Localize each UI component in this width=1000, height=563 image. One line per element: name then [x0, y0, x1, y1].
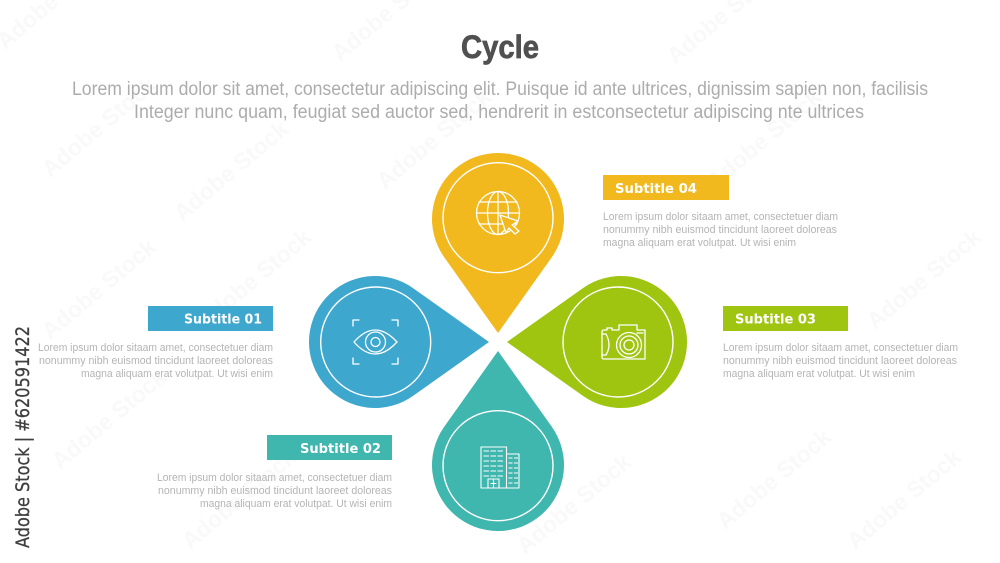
text: Adobe Stock: [192, 223, 316, 334]
text: Adobe Stock: [37, 233, 161, 344]
text block: subtitle 04: [603, 211, 838, 249]
text block: subtitle 04: Lorem ipsum dolor sitaam amet, consectetuer diam: [603, 211, 838, 223]
icon: globe with cursor: [476, 192, 520, 234]
label: subtitle 01: Subtitle 01: [184, 312, 262, 328]
panel: drop 03 green: [507, 276, 687, 408]
label: subtitle 04: Subtitle 04: [615, 181, 697, 197]
text block: subtitle 04: nonummy nibh euismod tincidunt laoreet doloreas: [603, 224, 837, 236]
text: Adobe Stock: [702, 83, 826, 194]
label: subtitle 01: [148, 306, 273, 331]
text: Adobe Stock: [47, 363, 171, 474]
stock id text: Adobe Stock | #620591422: [12, 326, 34, 548]
intro text: [72, 79, 928, 123]
text block: subtitle 01: nonummy nibh euismod tincidunt laoreet doloreas: [39, 355, 273, 367]
intro text: Lorem ipsum dolor sit amet, consectetur adipiscing elit. Puisque id ante ultrices, dignissim sapien non, facilisis: [72, 79, 928, 100]
text block: subtitle 02: [157, 472, 392, 510]
panel: drop 01 blue: [309, 276, 489, 408]
icon: eye in focus frame: [353, 320, 398, 364]
text: Adobe Stock: [842, 443, 966, 554]
text block: subtitle 02: nonummy nibh euismod tincidunt laoreet doloreas: [158, 485, 392, 497]
text block: subtitle 03: magna aliquam erat volutpat. Ut wisi enim: [723, 368, 915, 380]
panel: drop 04 yellow: [432, 153, 564, 333]
text block: subtitle 01: Lorem ipsum dolor sitaam amet, consectetuer diam: [38, 342, 273, 354]
label: subtitle 03: Subtitle 03: [735, 312, 816, 328]
title: Cycle: [461, 29, 539, 65]
text: Adobe Stock: [862, 223, 986, 334]
label: subtitle 02: [267, 435, 392, 460]
panel: drop 02 teal: [432, 351, 564, 531]
label: subtitle 02: Subtitle 02: [300, 441, 381, 457]
text block: subtitle 03: nonummy nibh euismod tincidunt laoreet doloreas: [723, 355, 957, 367]
label: subtitle 03: [723, 306, 848, 331]
text block: subtitle 04: magna aliquam erat volutpat. Ut wisi enim: [603, 237, 796, 249]
text block: subtitle 03: [723, 342, 958, 380]
text block: subtitle 02: Lorem ipsum dolor sitaam amet, consectetuer diam: [157, 472, 392, 484]
text: Adobe Stock: [37, 71, 161, 182]
text block: subtitle 02: magna aliquam erat volutpat. Ut wisi enim: [200, 498, 392, 510]
icon: office building: [481, 447, 519, 488]
text block: subtitle 01: magna aliquam erat volutpat. Ut wisi enim: [81, 368, 273, 380]
text: Adobe Stock: [512, 448, 636, 559]
icon: camera: [602, 325, 645, 359]
text: Adobe Stock: [712, 423, 836, 534]
text: Adobe Stock: [177, 443, 301, 554]
intro text: Integer nunc quam, feugiat sed auctor sed, hendrerit in estconsectetur adipiscing nte ultrices: [134, 102, 864, 123]
text block: subtitle 01: [38, 342, 273, 380]
text: Adobe Stock: [372, 83, 496, 194]
label: subtitle 04: [603, 175, 729, 200]
text block: subtitle 03: Lorem ipsum dolor sitaam amet, consectetuer diam: [723, 342, 958, 354]
text: Adobe Stock: [169, 115, 293, 226]
